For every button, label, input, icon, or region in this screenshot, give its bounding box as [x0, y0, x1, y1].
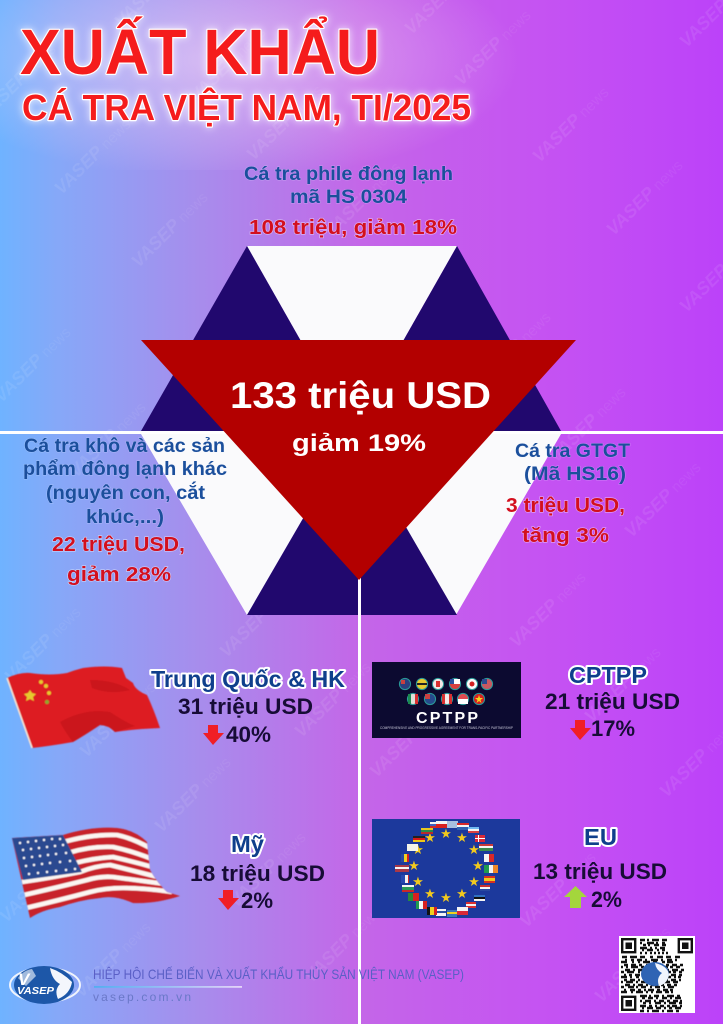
label: dried and other frozen: khúc,...) [86, 506, 164, 528]
icon: US flag [12, 826, 180, 918]
watermark pattern: VASEP news [470, 307, 554, 391]
icon: down arrow [570, 720, 591, 740]
icon: EU flag circle: ★ [412, 842, 424, 857]
icon: EU flag circle: ★ [456, 886, 468, 901]
label: dried and other frozen: 22 triệu USD, [52, 533, 185, 556]
icon: China flag [7, 666, 160, 748]
watermark pattern: VASEP news [580, 642, 664, 726]
watermark pattern: VASEP news [225, 827, 309, 911]
icon: up arrow [564, 886, 587, 908]
watermark pattern: VASEP news [590, 922, 674, 1006]
title [20, 15, 471, 128]
market: China and HK: 40% [226, 722, 271, 747]
watermark pattern: VASEP news [215, 577, 299, 661]
lower navy triangle [247, 434, 457, 615]
market: CPTPP: 17% [591, 716, 635, 741]
market: EU [533, 824, 667, 912]
icon: down arrow [203, 725, 224, 745]
icon: down arrow [218, 890, 239, 910]
watermark pattern: VASEP news [545, 382, 629, 466]
label: value added: Cá tra GTGT [515, 440, 630, 462]
icon: EU flag circle: ★ [440, 890, 452, 905]
watermark pattern: VASEP news [602, 155, 686, 239]
label: dried and other frozen: phẩm đông lạnh khác [23, 458, 227, 480]
market: CPTPP: 21 triệu USD [545, 689, 680, 714]
divider lines [0, 431, 723, 1024]
icon: EU flag circle: ★ [424, 886, 436, 901]
label: dried and other frozen [23, 435, 227, 586]
footer organisation text [93, 965, 464, 1004]
central red triangle [141, 340, 576, 580]
watermark pattern: VASEP news [242, 80, 326, 164]
watermark pattern: VASEP news [515, 847, 599, 931]
icon: EU flag circle: ★ [440, 826, 452, 841]
logo: VASEP: VASEP [17, 986, 54, 997]
label: value added: tăng 3% [522, 524, 609, 547]
market: USA: Mỹ [231, 831, 264, 857]
icon: EU flag circle: ★ [424, 830, 436, 845]
icon: CPTPP banner: CPTPP [416, 710, 478, 727]
watermark pattern: VASEP news [290, 657, 374, 741]
title line 2: CÁ TRA VIỆT NAM, TI/2025 [22, 86, 471, 128]
hexagram diagram [141, 246, 561, 616]
watermark pattern: VASEP news [50, 114, 134, 198]
QR centre logo [641, 962, 669, 986]
label: frozen fillet [244, 163, 457, 239]
watermark pattern: VASEP news [127, 187, 211, 271]
label: frozen fillet: mã HS 0304 [290, 186, 407, 208]
market: China and HK: 31 triệu USD [178, 694, 313, 719]
icon: EU flag circle: ★ [468, 842, 480, 857]
lower white triangles [141, 434, 352, 615]
market: USA [190, 831, 325, 913]
label: frozen fillet: 108 triệu, giảm 18% [249, 216, 457, 239]
label: dried and other frozen: giảm 28% [67, 563, 171, 586]
label: value added: (Mã HS16) [524, 463, 626, 485]
watermark pattern: VASEP news [0, 602, 84, 686]
upper white triangle [247, 246, 457, 431]
watermark pattern: VASEP news [185, 22, 269, 106]
market: EU: EU [584, 824, 617, 850]
watermark pattern: VASEP news [75, 677, 159, 761]
market: CPTPP: CPTPP [569, 662, 647, 688]
logo: VASEP [10, 966, 80, 1004]
upper navy triangles [141, 246, 352, 431]
icon: EU flag circle: ★ [468, 874, 480, 889]
market: EU: 13 triệu USD [533, 859, 667, 884]
watermark pattern: VASEP news [450, 5, 534, 89]
icon: EU flag circle: ★ [456, 830, 468, 845]
watermark pattern: VASEP news [620, 457, 704, 541]
label: value added [506, 440, 630, 547]
watermark pattern: VASEP news [505, 567, 589, 651]
market: China and HK [151, 666, 345, 747]
watermark pattern: VASEP news [65, 397, 149, 481]
watermark pattern: VASEP news [365, 697, 449, 781]
footer organisation text: vasep.com.vn [93, 990, 191, 1004]
total value: 133 triệu USD [230, 375, 491, 416]
market: USA: 2% [241, 888, 273, 913]
watermark pattern: VASEP news [528, 82, 612, 166]
icon: EU flag circle [372, 819, 520, 918]
watermark pattern: VASEP news [70, 917, 154, 1001]
icon: CPTPP banner [372, 662, 521, 738]
title line 1: XUẤT KHẨU [20, 15, 380, 88]
market: CPTPP [545, 662, 680, 741]
label: dried and other frozen: Cá tra khô và các sản [24, 435, 225, 457]
label: dried and other frozen: (nguyên con, cắt [46, 480, 206, 504]
label: frozen fillet: Cá tra phile đông lạnh [244, 163, 453, 185]
watermark pattern: VASEP news [300, 902, 384, 986]
QR code [619, 936, 695, 1013]
logo: VASEP: V [18, 970, 31, 989]
icon: EU flag circle: ★ [472, 858, 484, 873]
icon: EU flag circle: ★ [412, 874, 424, 889]
market: China and HK: Trung Quốc & HK [151, 666, 345, 692]
label: value added: 3 triệu USD, [506, 494, 625, 517]
watermark pattern: VASEP news [320, 157, 404, 241]
icon: EU flag circle: ★ [408, 858, 420, 873]
market: USA: 18 triệu USD [190, 861, 325, 886]
watermark pattern: VASEP news [150, 752, 234, 836]
footer organisation text: HIỆP HỘI CHẾ BIẾN VÀ XUẤT KHẨU THỦY SẢN VIỆT NAM (VASEP) [93, 965, 464, 982]
icon: CPTPP banner: COMPREHENSIVE AND PROGRESSIVE AGREEMENT FOR TRANS-PACIFIC PARTNERSHIP [380, 726, 514, 730]
market: EU: 2% [591, 887, 622, 912]
total change: giảm 19% [292, 430, 426, 457]
